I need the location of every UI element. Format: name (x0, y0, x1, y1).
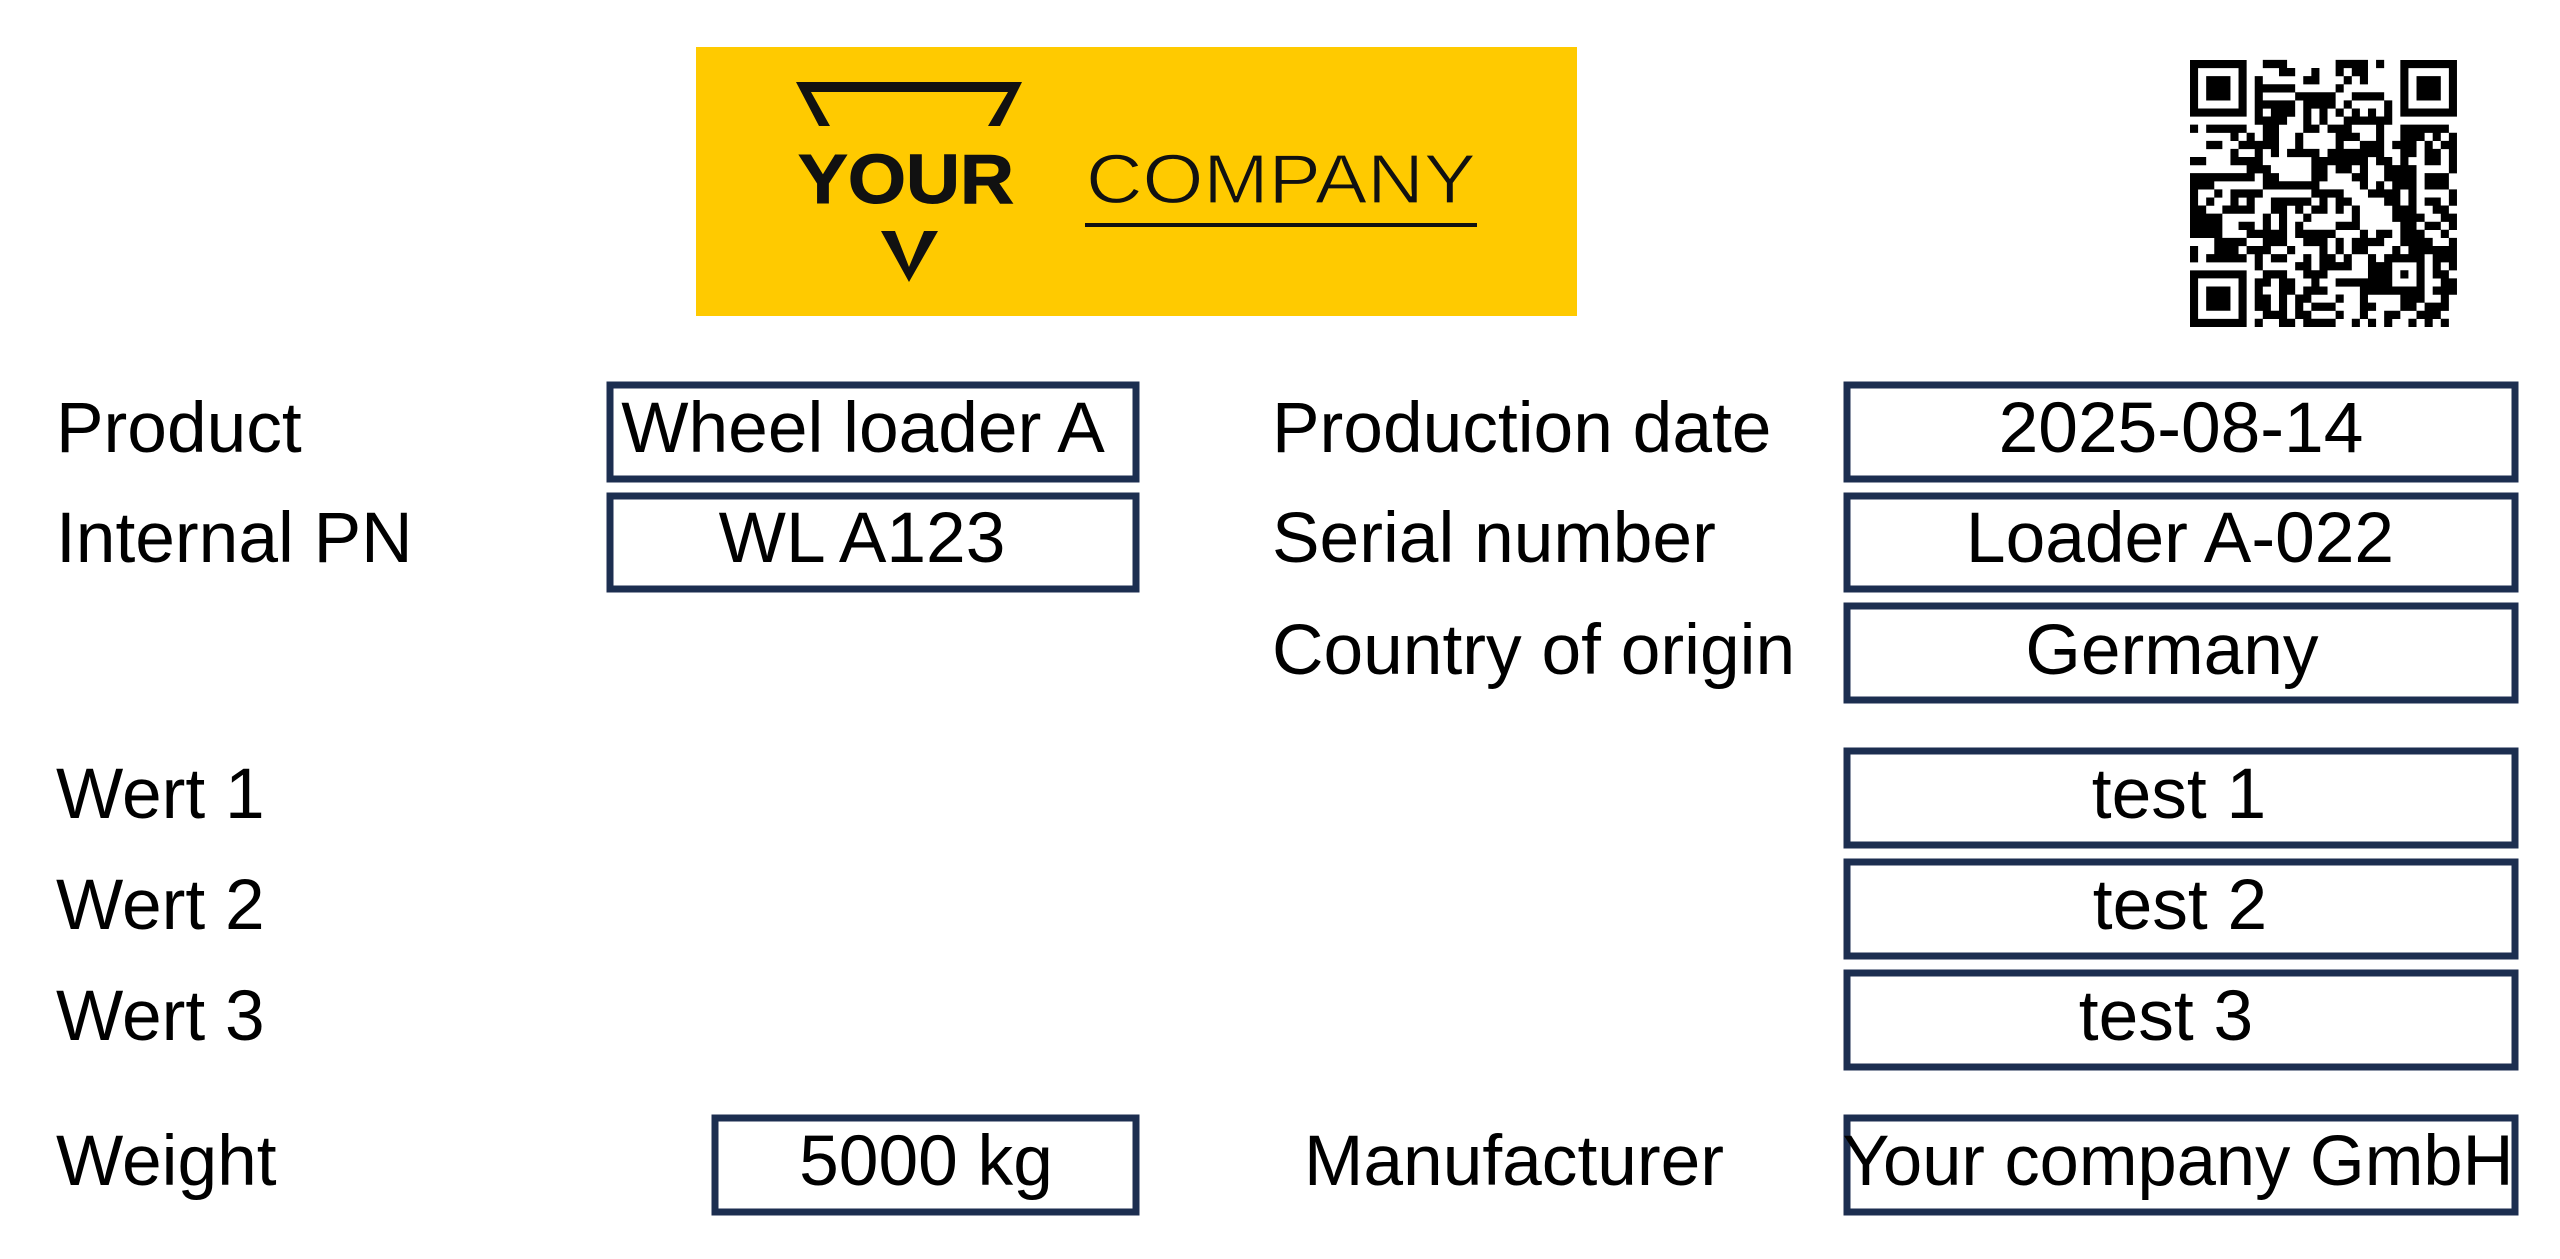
label: Manufacturer: Manufacturer (1304, 1121, 1724, 1201)
value box: Wheel loader A: Wheel loader A (621, 388, 1105, 468)
label: Wert 3: Wert 3 (56, 976, 265, 1056)
logo: your company (696, 47, 1577, 316)
logo icon: chevron (881, 231, 938, 282)
value box: country value (1847, 606, 2515, 700)
logo word: COMPANY: COMPANY (1086, 140, 1476, 218)
value box: serial number value (1847, 496, 2515, 589)
value box: test 3 (1847, 973, 2515, 1067)
value box: test 1: test 1 (2092, 754, 2266, 834)
label: Serial number: Serial number (1272, 498, 1716, 578)
value box: WL A123: WL A123 (719, 498, 1005, 578)
label: Internal PN: Internal PN (56, 498, 413, 578)
value box: test 3: test 3 (2079, 976, 2253, 1056)
value box: test 2: test 2 (2093, 865, 2267, 945)
value box: Your company GmbH: Your company GmbH (1842, 1121, 2514, 1201)
logo word: YOUR: YOUR (798, 140, 1014, 218)
value box: country value: Germany (2025, 610, 2319, 690)
label: Wert 2: Wert 2 (56, 865, 265, 945)
value box: production date value: 2025-08-14 (1999, 388, 2363, 468)
QR code (2190, 64, 2457, 323)
label: Country of origin: Country of origin (1272, 610, 1795, 690)
value box: 5000 kg: 5000 kg (799, 1121, 1053, 1201)
logo icon: open triangle (796, 82, 1022, 126)
value box: test 2 (1847, 862, 2515, 956)
label: Product: Product (56, 388, 302, 468)
label: Weight: Weight (56, 1121, 277, 1201)
value box: production date value (1847, 385, 2515, 479)
value box: 5000 kg (715, 1118, 1136, 1212)
value box: serial number value: Loader A-022 (1966, 498, 2394, 578)
value box: test 1 (1847, 751, 2515, 845)
value box: WL A123 (610, 496, 1136, 589)
logo underline (1085, 223, 1477, 227)
label: Production date: Production date (1272, 388, 1771, 468)
label: Wert 1: Wert 1 (56, 754, 265, 834)
